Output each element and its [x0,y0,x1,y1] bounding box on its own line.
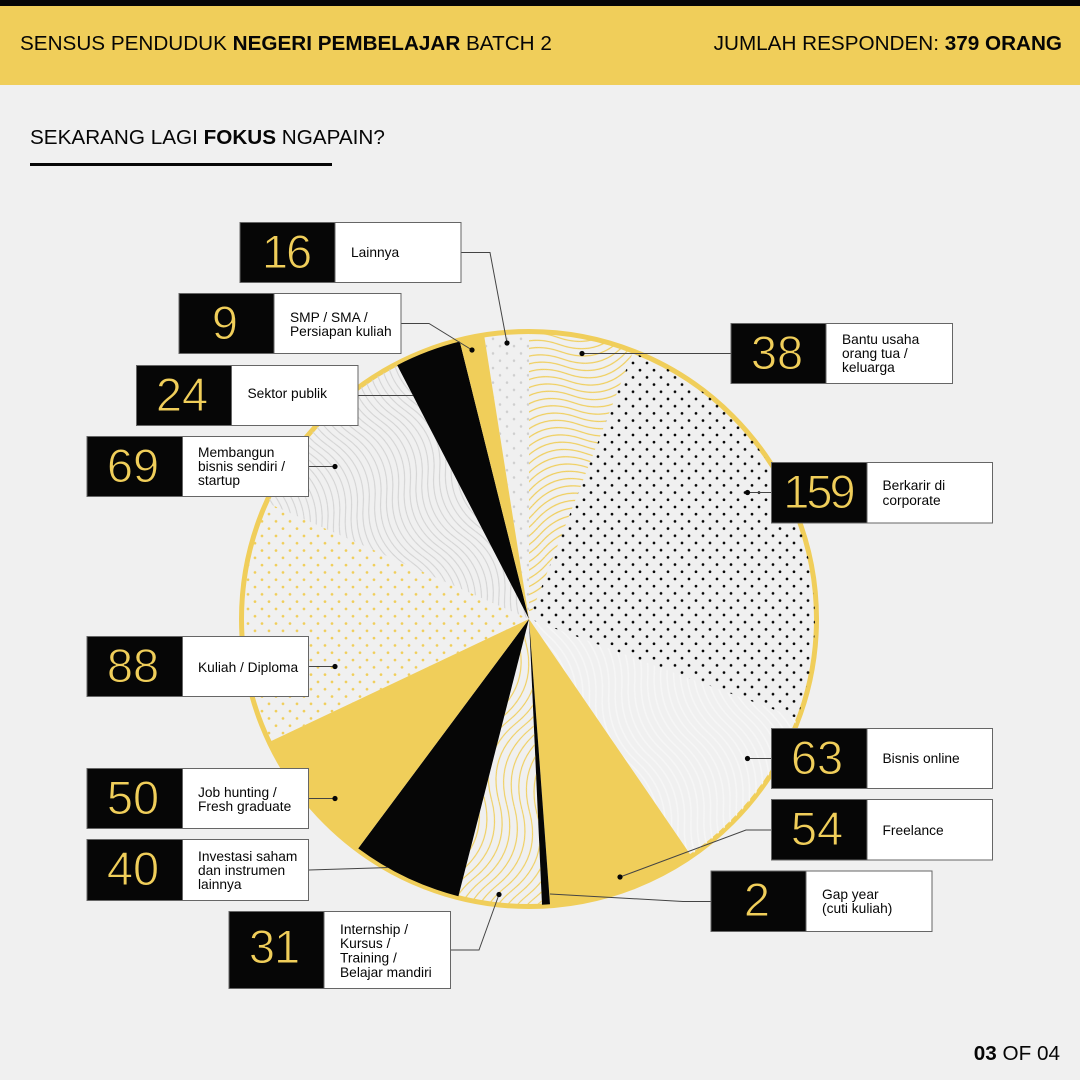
callout: Investasi 40: Investasi saham [198,849,297,864]
callout: Job hunting 50: 50 [107,771,159,824]
header band [0,0,1080,85]
callout: Berkarir 159: 159 [783,465,854,518]
callout: Bisnis online 63: 63 [791,731,843,784]
callout: Membangun bisnis 69: bisnis sendiri / [198,459,285,474]
pie chart [242,332,816,906]
question heading: SEKARANG LAGI FOKUS NGAPAIN? [30,126,385,149]
callout: Bantu usaha 38: Bantu usaha [842,332,920,347]
callout: Lainnya 16: 16 [262,225,311,278]
callout: SMP / SMA 9 [179,294,475,354]
callout: Investasi 40: dan instrumen [198,863,285,878]
callout: Sektor publik 24 [136,366,413,426]
callout: Membangun bisnis 69: startup [198,473,240,488]
callout: Bisnis online 63 [745,728,992,788]
slice: Freelance [529,619,691,904]
slice: Berkarir di corporate [529,352,815,718]
callout: Sektor publik 24: 24 [156,368,208,421]
callout: Membangun bisnis 69: 69 [107,439,159,492]
respondent count: JUMLAH RESPONDEN: 379 ORANG [714,32,1062,55]
callout: Freelance 54 [617,800,992,880]
callout: Job hunting 50: Fresh graduate [198,799,292,814]
callout: Internship 31 [229,892,502,988]
callout: Bantu usaha 38: 38 [751,326,803,379]
slice: Sektor publik [397,342,529,619]
callout: Gap year 2: 2 [744,873,770,926]
callout: Bantu usaha 38: keluarga [842,360,895,375]
callout: Internship 31: Kursus / [340,936,391,951]
slice: Bisnis online [529,619,797,855]
question heading [30,126,385,166]
callout: Sektor publik 24: Sektor publik [248,386,327,401]
slice: Investasi [358,619,529,896]
callout: Lainnya 16 [240,222,510,346]
slice: Membangun bisnis [268,365,529,619]
callout: Internship 31: Internship / [340,922,408,937]
callout: Investasi 40: 40 [107,842,159,895]
callout: Lainnya 16: Lainnya [351,245,400,260]
callout: Investasi 40: lainnya [198,877,242,892]
page number: 03 OF 04 [974,1042,1060,1065]
header title: SENSUS PENDUDUK NEGERI PEMBELAJAR BATCH 2 [20,32,552,55]
callout: Membangun bisnis 69 [87,436,338,496]
callout: Kuliah 88: Kuliah / Diploma [198,660,298,675]
callout: Kuliah 88 [87,636,338,696]
slice: SMP SMA [460,336,529,619]
callout: Job hunting 50 [87,768,338,828]
callout: Berkarir 159: corporate [882,493,941,508]
callout: Internship 31: Training / [340,950,397,966]
callout: Gap year 2: (cuti kuliah) [822,901,892,916]
callout: Gap year 2: Gap year [822,887,879,902]
callout: Investasi 40 [87,840,388,900]
slice: Internship [458,619,542,905]
callout: Internship 31: Belajar mandiri [340,965,432,980]
callout: Job hunting 50: Job hunting / [198,785,277,800]
slice: Bantu usaha orang tua [529,333,633,619]
callout: Berkarir 159 [745,462,992,523]
callout: SMP / SMA 9: 9 [212,296,238,349]
callout: Gap year 2 [550,871,932,932]
callout: SMP / SMA 9: SMP / SMA / [290,310,368,325]
callout: SMP / SMA 9: Persiapan kuliah [290,324,392,339]
callout: Bantu usaha 38: orang tua / [842,346,908,361]
callout: Kuliah 88: 88 [107,639,159,692]
slice: Job hunting [270,619,529,848]
callout: Freelance 54: 54 [791,802,843,855]
callout: Freelance 54: Freelance [882,823,944,838]
callout: Bisnis online 63: Bisnis online [882,751,960,766]
slice: Gap year [529,619,550,905]
callout: Berkarir 159: Berkarir di [882,478,945,493]
callout: Internship 31: 31 [249,920,299,973]
callout: Bantu usaha 38 [579,324,952,384]
slice: Lainnya [484,333,529,619]
slice: Kuliah [243,503,529,741]
callout: Membangun bisnis 69: Membangun [198,445,274,460]
